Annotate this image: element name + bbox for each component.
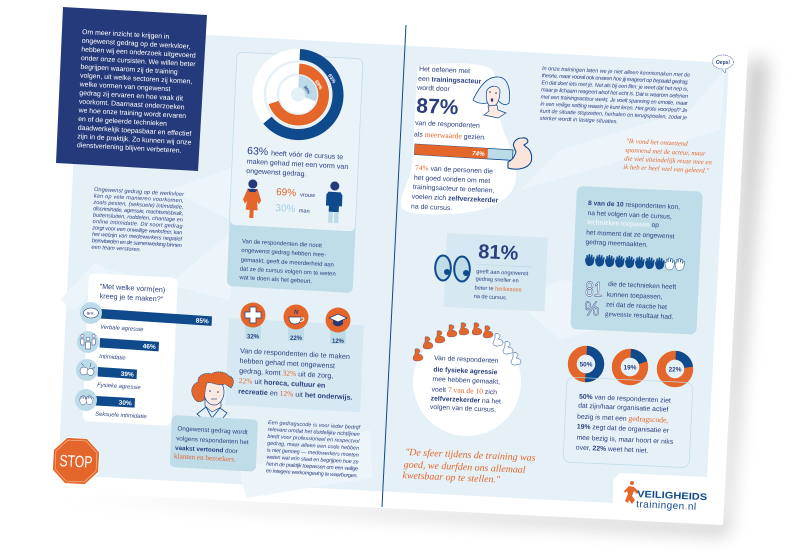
panel: card footer	[227, 212, 356, 293]
text: 74% statistic: voelen zich zelfverzekerder	[412, 194, 499, 205]
text block: gedragscode: relevant omdat het duidelijke richtlijnen	[268, 427, 360, 438]
panel: intro navy box: en of de geleerde technieken	[78, 116, 167, 128]
text block: gedragscode: weten wat erin staat en begrijpen hoe ze	[266, 455, 359, 466]
panel: intro navy box: zijn in de praktijk. Zo kunnen wij onze	[77, 133, 192, 147]
text: 63% statistic: heeft vóór de cursus te	[271, 149, 343, 161]
text: 63% statistic: maken gehad met een vorm van	[246, 158, 349, 171]
progress bar 74%	[415, 144, 513, 160]
text: gender split: 69%	[276, 187, 296, 199]
sheet shadow	[60, 60, 768, 535]
text: sector statistics: gedrag, komt 32% uit de zorg,	[239, 366, 334, 380]
bar: intimidatie	[99, 338, 159, 364]
chart: donut 22%	[661, 355, 689, 383]
text: 87% statistic: Het oefenen met	[419, 66, 470, 75]
panel: trainingsacteur blob	[401, 63, 532, 214]
panel: gedragscode card: dat zijn/haar organisatie actief	[578, 403, 669, 414]
text: 8 van de 10	[585, 200, 680, 250]
text: 74% statistic: na de cursus.	[411, 203, 453, 212]
text block: ongewenst gedrag intro: zoals pesten, (seksuele) intimidatie,	[92, 200, 184, 211]
text: 8 van de 10: gedrag meemaakten.	[585, 239, 648, 249]
bar: seksuele intimidatie: 30%	[119, 400, 132, 407]
icon: horeca cup: N	[294, 310, 299, 316]
text: agressie statistic: die fysieke agressie	[433, 366, 498, 376]
text block: ongewenst gedrag intro	[90, 187, 186, 256]
text: 8 van de 10: 8 van de 10 respondenten kon,	[588, 200, 680, 211]
text block: in onze trainingen	[540, 66, 690, 128]
bar: verbale agressie	[100, 309, 212, 338]
text: 74% statistic: trainingsacteur te oefenen,	[413, 184, 495, 195]
panel: gedragscode card: 50% van de respondenten ziet	[579, 394, 671, 405]
panel: gedragscode card	[563, 377, 693, 468]
text: techniques result: gewenste resultaat had.	[605, 310, 674, 321]
icon: flexed arm	[508, 138, 532, 169]
chart: concentric donut	[250, 46, 346, 143]
icon: speech bubble: Grrr..	[87, 312, 95, 316]
panel: klanten en bezoekers: volgens respondenten het	[176, 435, 249, 446]
panel: bar chart card: "Met welke vorm(en)	[99, 282, 165, 294]
quote: acteur: "Ik vond het ontzettend	[626, 138, 689, 148]
panel: sectors	[225, 302, 364, 412]
text block: ongewenst gedrag intro: buitensluiten, roddelen, chantage en	[93, 213, 183, 224]
panel: gedragscode card: bezig is met een gedragscode,	[577, 412, 669, 425]
text: card footer: wat te doen als het gebeurt.	[238, 275, 313, 285]
text: sector statistics: 22% uit horeca, cultuur en	[239, 376, 326, 390]
text: outlined 81%: 81	[585, 278, 603, 302]
illustration: person with orange hair	[192, 372, 233, 424]
text: gender split: 30%	[275, 203, 296, 215]
panel: gedragscode card: mee bezig is, maar hoort er niks	[576, 435, 674, 446]
text: outlined 81%: %	[584, 298, 600, 321]
text block: gedragscode: Een gedragscode is voor ieder bedrijf	[268, 420, 361, 431]
text: 81% statistic	[474, 241, 534, 302]
text block: in onze trainingen: kunt de situatie stopzetten, herhalen en terugspoelen, zodat je	[540, 109, 687, 121]
center fold line	[382, 25, 406, 507]
chart: donut 50%	[572, 350, 600, 378]
text: 81% statistic: geeft aan ongewenst	[476, 269, 529, 277]
text: agressie statistic: Van de respondenten	[434, 355, 499, 365]
text: 81% statistic: beter te herkennen	[474, 284, 523, 294]
text: gender split: vrouw	[300, 192, 316, 199]
text: agressie statistic: voelt 7 van de 10 zich	[431, 384, 497, 396]
card body	[229, 52, 363, 232]
text block: ongewenst gedrag intro: het welzijn van medewerkers negatief	[92, 232, 184, 243]
text: 8 van de 10: technieken toepassen op	[587, 217, 659, 229]
panel: klanten en bezoekers: klanten en bezoekers.	[174, 452, 236, 464]
text: agressie statistic: zelfverzekerder na het	[431, 395, 501, 406]
logo: veiligheidstrainingen.nl	[624, 481, 708, 513]
text: 8 van de 10: na het volgen van de cursus,	[587, 210, 672, 221]
panel: intro navy box: onder onze cursisten. We willen beter	[81, 55, 196, 68]
panel: intro navy box: dienstverlening blijven verbeteren.	[77, 142, 182, 155]
icon: eyes	[435, 256, 470, 282]
text: sector statistics: hebben gehad met ongewenst	[239, 357, 335, 370]
icon: fists	[76, 359, 98, 381]
quote: sfeer: goed, we durfden ons allemaal	[403, 459, 526, 476]
panel: klanten en bezoekers: Ongewenst gedrag wordt	[177, 425, 248, 436]
chart: donut 19%	[616, 353, 644, 381]
text: 87% statistic: van de respondenten	[415, 120, 480, 130]
chart: donut 50%: 50%	[580, 361, 593, 368]
illustration: woman with short hair	[473, 77, 510, 118]
text block: gedragscode: is niet genoeg — medewerkers moeten	[267, 448, 359, 459]
panel: intro navy box: we hoe onze training wordt ervaren	[77, 107, 186, 120]
text block: in onze trainingen: maar je lichaam reageert alsof het echt is. Dát is waarom oefenen	[541, 87, 688, 100]
panel: bar chart card: kreeg je te maken?"	[100, 291, 164, 304]
logo text	[636, 489, 708, 513]
panel: donut card	[227, 46, 363, 293]
text block: gedragscode: het in de praktijk toepassen om een veilige	[266, 461, 358, 472]
text block: gedragscode: gedrag, maar alleen een code hebben	[267, 441, 359, 452]
icon: hands	[75, 389, 97, 411]
text block: ongewenst gedrag intro: online intimidatie. Dit soort gedrag	[92, 219, 184, 230]
icon: speech bubble oeps	[712, 55, 734, 73]
text: agressie statistic: mee hebben gemaakt,	[432, 376, 500, 386]
text: gender split: man	[299, 208, 310, 215]
text block: ongewenst gedrag intro: zorgt voor een onveilige werksfeer, kan	[91, 225, 182, 236]
panel: 8 van de 10 technieken	[570, 186, 703, 335]
panel: intro navy box: welke vormen van ongewenst	[79, 81, 171, 93]
icon: man	[325, 181, 343, 223]
panel: intro navy box: Om meer inzicht te krijgen in	[82, 29, 170, 41]
panel: 81% herkennen	[435, 233, 548, 312]
text: 81% statistic: 81%	[478, 241, 519, 265]
text block: in onze trainingen: in een veilige setting waarin je kunt leren. Het grote voordeel? Je	[540, 102, 688, 114]
background arrows	[60, 70, 725, 498]
chart: donut 22%: 22%	[669, 366, 682, 373]
text: 74% statistic: 74% van de personen die	[415, 163, 493, 176]
quote: acteur: die viel uiteindelijk reuze mee en	[624, 155, 713, 166]
text block: ongewenst gedrag intro: Ongewenst gedrag op de werkvloer	[94, 187, 185, 198]
panel: klanten en bezoekers	[170, 415, 258, 472]
text: techniques result: kunnen toepassen,	[607, 291, 663, 301]
icon: horeca cup: 22%	[290, 336, 303, 342]
icon: stop sign: STOP	[59, 452, 93, 472]
quote: acteur: spannend met de acteur, maar	[625, 147, 706, 158]
text block: ongewenst gedrag intro: een team verstoren.	[91, 245, 141, 253]
text: card footer: ongewenst gedrag hebben mee-	[241, 248, 326, 259]
icon: speech bubble	[80, 302, 102, 324]
text: 74% statistic: het goed vonden om met	[414, 175, 490, 185]
bar: intimidatie: Intimidatie	[99, 354, 126, 362]
chart: concentric donut: 30%	[303, 85, 312, 95]
bar: fysieke agressie: Fysieke agressie	[97, 383, 142, 391]
icon: stop sign	[52, 437, 100, 485]
bar: seksuele intimidatie	[95, 396, 148, 420]
quote: acteur	[623, 138, 713, 175]
panel: intro navy box: begrijpen waarom zij de training	[80, 64, 178, 76]
text: agressie statistic: volgen van de cursus.	[430, 404, 496, 414]
logo text: trainingen.nl	[636, 499, 696, 513]
icon: speech bubble oeps: Oeps!	[716, 60, 730, 66]
panel: intro navy box: volgen, uit welke sectoren zij komen,	[80, 73, 192, 86]
text: 87% statistic	[414, 66, 489, 142]
text: 8 van de 10: het moment dat ze ongewenst	[586, 229, 675, 240]
chart: concentric donut: 63%	[326, 73, 337, 85]
text block: ongewenst gedrag intro: discriminatie, agressie, machtsmisbruik,	[93, 206, 183, 217]
text: card footer: gemaakt, geeft de meerderheid aan	[240, 257, 334, 269]
text: card footer	[238, 239, 337, 286]
text block: gedragscode: biedt voor professioneel en respectvol	[267, 434, 360, 445]
text: 81% statistic: na de cursus.	[474, 294, 508, 301]
text: 87% statistic: een trainingsacteur	[418, 76, 482, 86]
text: sector statistics: recreatie en 12% uit het onderwijs.	[238, 387, 353, 402]
panel: intro navy box: voorkomt. Daarnaast onderzoeken	[79, 99, 185, 111]
text: 63% statistic: ongewenst gedrag.	[246, 167, 307, 178]
icon row: arms	[413, 323, 521, 365]
text: sector statistics: Van de respondenten die te maken	[240, 347, 350, 361]
panel: intro navy box: hebben wij een onderzoek uitgevoerd	[81, 46, 196, 60]
panel: intro navy box	[56, 7, 207, 171]
panel: intro navy box: ongewenst gedrag op de werkvloer,	[82, 38, 191, 51]
logo text: VEILIGHEIDS	[637, 489, 708, 503]
panel: klanten en bezoekers: vaakst vertoond door	[175, 445, 238, 455]
icon: onderwijs cap: 12%	[332, 339, 345, 345]
text: 87% statistic: 87%	[416, 94, 459, 119]
icon: running figure	[624, 481, 639, 504]
bar: intimidatie: 46%	[143, 343, 156, 351]
icon: zorg: 32%	[247, 334, 260, 340]
text: 63% statistic	[246, 145, 349, 181]
chart: concentric donut: 69%	[313, 79, 324, 91]
text block: in onze trainingen: sterker wordt in lastige situaties.	[540, 116, 618, 125]
text: 63% statistic: 63%	[247, 145, 268, 158]
text: agressie statistic	[430, 355, 503, 414]
text: techniques result: zei dat de reactie het	[606, 301, 667, 311]
text block: in onze trainingen: En dat doet iets met je. Net als bij een film: je weet dat het nep is,	[541, 80, 689, 93]
panel: intro navy box: daadwerkelijk toepasbaar en effectief	[78, 125, 192, 138]
bar: fysieke agressie	[97, 367, 142, 391]
text: 87% statistic: wordt door	[416, 85, 451, 93]
icon: woman	[242, 179, 262, 218]
icon row: hands	[585, 254, 685, 270]
panel: bar chart card	[75, 273, 212, 426]
progress bar 74%: 74%	[472, 150, 485, 158]
panel: fysieke agressie circle	[413, 323, 521, 436]
bar: verbale agressie: Verbale agressie	[100, 325, 144, 333]
bar: fysieke agressie: 39%	[121, 371, 134, 379]
chart: donut 19%: 19%	[624, 364, 637, 371]
text: 74% statistic	[411, 163, 500, 214]
text: sector statistics	[238, 347, 354, 402]
text block: in onze trainingen: met een trainingsacteur werkt. Je voelt spanning en emotie, maar	[541, 94, 689, 107]
quote: sfeer: kwetsbaar op te stellen."	[402, 470, 501, 486]
text: card footer: Van de respondenten die nooit	[242, 239, 322, 249]
text block: in onze trainingen: theorie, maar vooral ook ervaren hoe jij reageert op bepaald gedrag.	[542, 73, 689, 86]
panel: gedragscode card: over, 22% weet het niet.	[576, 445, 649, 455]
text: techniques result	[605, 281, 677, 321]
bar: seksuele intimidatie: Seksuele intimidatie	[95, 412, 148, 420]
text: outlined 81%	[584, 278, 603, 321]
icon: horeca cup	[284, 304, 308, 342]
text: 81% statistic: gedrag sneller en	[475, 276, 519, 284]
text: 87% statistic: als meerwaarde gezien.	[414, 129, 486, 142]
text block: ongewenst gedrag intro: beïnvloeden en de samenwerking binnen	[92, 238, 182, 249]
panel: intro navy box: gedrag zij ervaren en hoe vaak dit	[79, 90, 183, 103]
quote: sfeer: "De sfeer tijdens de training was	[405, 447, 536, 464]
text: card footer: dat ze de cursus volgen om te weten	[240, 266, 336, 278]
panel: gedragscode card: 19% zegt dat de organisatie er	[577, 424, 670, 435]
quote: sfeer	[402, 447, 536, 487]
text block: gedragscode	[266, 420, 361, 479]
text block: ongewenst gedrag intro: kan op vele manieren voorkomen,	[94, 193, 184, 204]
bar: verbale agressie: 85%	[196, 318, 209, 325]
quote: acteur: ik heb er heel veel van geleerd."	[623, 164, 710, 175]
page background	[58, 28, 729, 503]
text block: gedragscode: en integere werkomgeving te waarborgen.	[266, 468, 358, 479]
text block: in onze trainingen: In onze trainingen laten we je niet alleen kennismaken met de	[542, 66, 690, 79]
text: gender split	[275, 187, 316, 216]
text: techniques result: die de technieken heeft	[608, 281, 677, 291]
icon: group	[77, 331, 99, 353]
